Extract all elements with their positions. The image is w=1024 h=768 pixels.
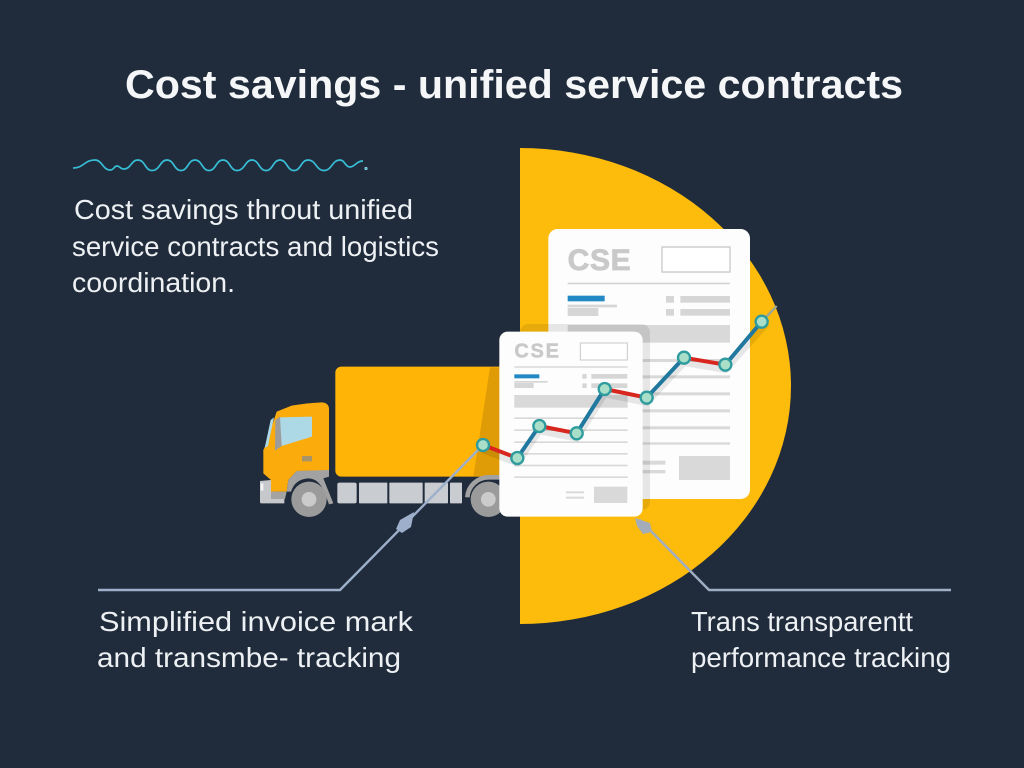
left caption: and transmbe- tracking [97, 642, 401, 673]
right caption: Trans transparentt [691, 606, 913, 637]
right caption [691, 606, 951, 673]
chart segments [483, 322, 762, 458]
intro text block [72, 194, 439, 298]
small invoice document [499, 332, 643, 517]
chart nodes [477, 316, 768, 464]
truck cab [260, 402, 329, 503]
chart shadow [483, 323, 767, 463]
intro text block: coordination. [72, 267, 235, 298]
truck front wheel [291, 482, 327, 517]
intro text block: Cost savings throut unified [74, 194, 413, 225]
truck fenders [287, 470, 513, 504]
line chart [477, 306, 777, 464]
right leader line [635, 518, 951, 590]
small document shadow [520, 324, 650, 510]
title: Cost savings - unified service contracts [125, 63, 903, 107]
large invoice document [548, 229, 750, 499]
decorative wave accent [73, 160, 367, 170]
chart tail [762, 306, 777, 322]
left leader line [98, 445, 483, 590]
small invoice document: CSE [514, 341, 559, 363]
left caption [97, 606, 414, 673]
icon: delivery truck [260, 367, 515, 517]
right caption: performance tracking [691, 642, 951, 673]
invoice documents [477, 229, 777, 517]
intro text block: service contracts and logistics [72, 231, 439, 262]
left caption: Simplified invoice mark [99, 606, 414, 637]
large invoice document: CSE [568, 244, 631, 277]
truck rear wheel [471, 482, 506, 517]
yellow half circle [520, 148, 791, 624]
truck cargo box [335, 367, 515, 477]
truck chassis panels [337, 483, 462, 503]
